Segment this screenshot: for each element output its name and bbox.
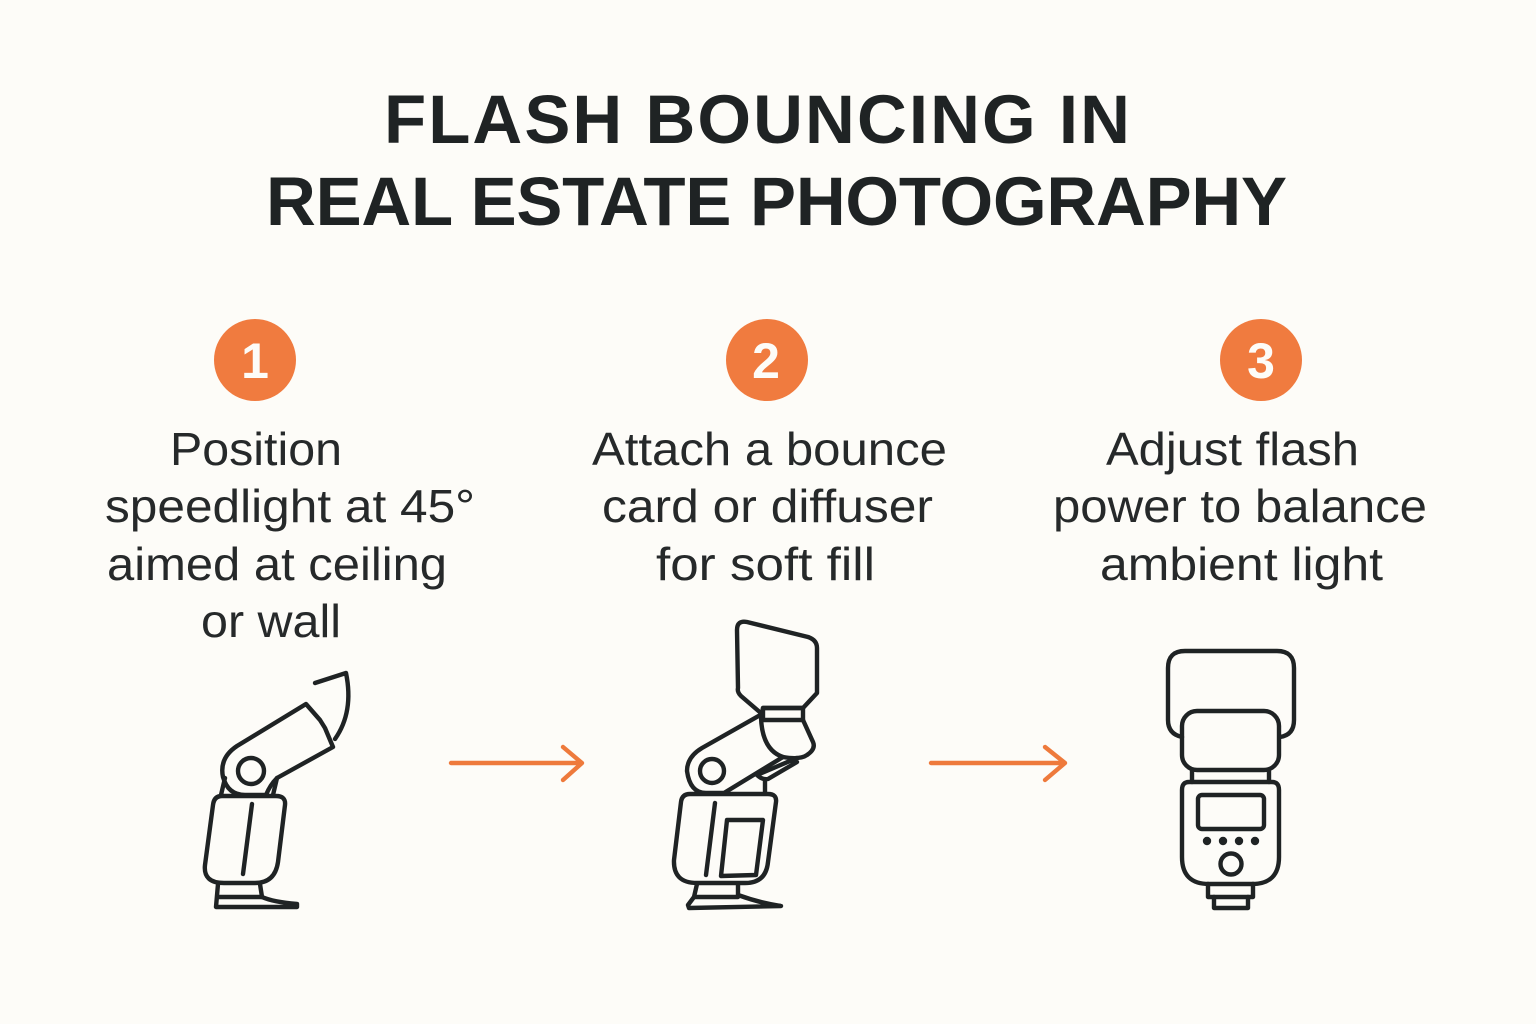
step 3 text: ambient light bbox=[1100, 538, 1383, 590]
step 3 text: Adjust flash bbox=[1106, 423, 1359, 475]
step 2 text: Attach a bounce bbox=[592, 423, 947, 475]
step 2 text bbox=[592, 423, 947, 590]
step 3 number badge bbox=[1220, 319, 1302, 401]
step 1 text: aimed at ceiling bbox=[107, 538, 447, 590]
step 1 text: speedlight at 45° bbox=[105, 480, 475, 532]
title bbox=[266, 81, 1287, 240]
step 3 number badge: 3 bbox=[1247, 333, 1275, 389]
title: REAL ESTATE PHOTOGRAPHY bbox=[266, 163, 1287, 240]
title: FLASH BOUNCING IN bbox=[384, 81, 1130, 158]
step 1 text: or wall bbox=[201, 595, 341, 647]
step 2 text: card or diffuser bbox=[602, 480, 933, 532]
step 2 number badge bbox=[726, 319, 808, 401]
icon: speedlight tilted 45 degrees bbox=[205, 673, 348, 907]
step 2 number badge: 2 bbox=[752, 333, 780, 389]
step 3 text: power to balance bbox=[1053, 480, 1427, 532]
arrow: step 1 to step 2 bbox=[451, 747, 582, 780]
icon: speedlight with bounce diffuser bbox=[674, 622, 817, 908]
step 1 text bbox=[105, 423, 475, 647]
step 3 text bbox=[1053, 423, 1427, 590]
icon: speedlight front view bbox=[1168, 651, 1294, 908]
step 1 text: Position bbox=[170, 423, 342, 475]
arrow: step 2 to step 3 bbox=[931, 747, 1065, 780]
step 1 number badge: 1 bbox=[241, 333, 269, 389]
step 1 number badge bbox=[214, 319, 296, 401]
step 2 text: for soft fill bbox=[656, 538, 875, 590]
